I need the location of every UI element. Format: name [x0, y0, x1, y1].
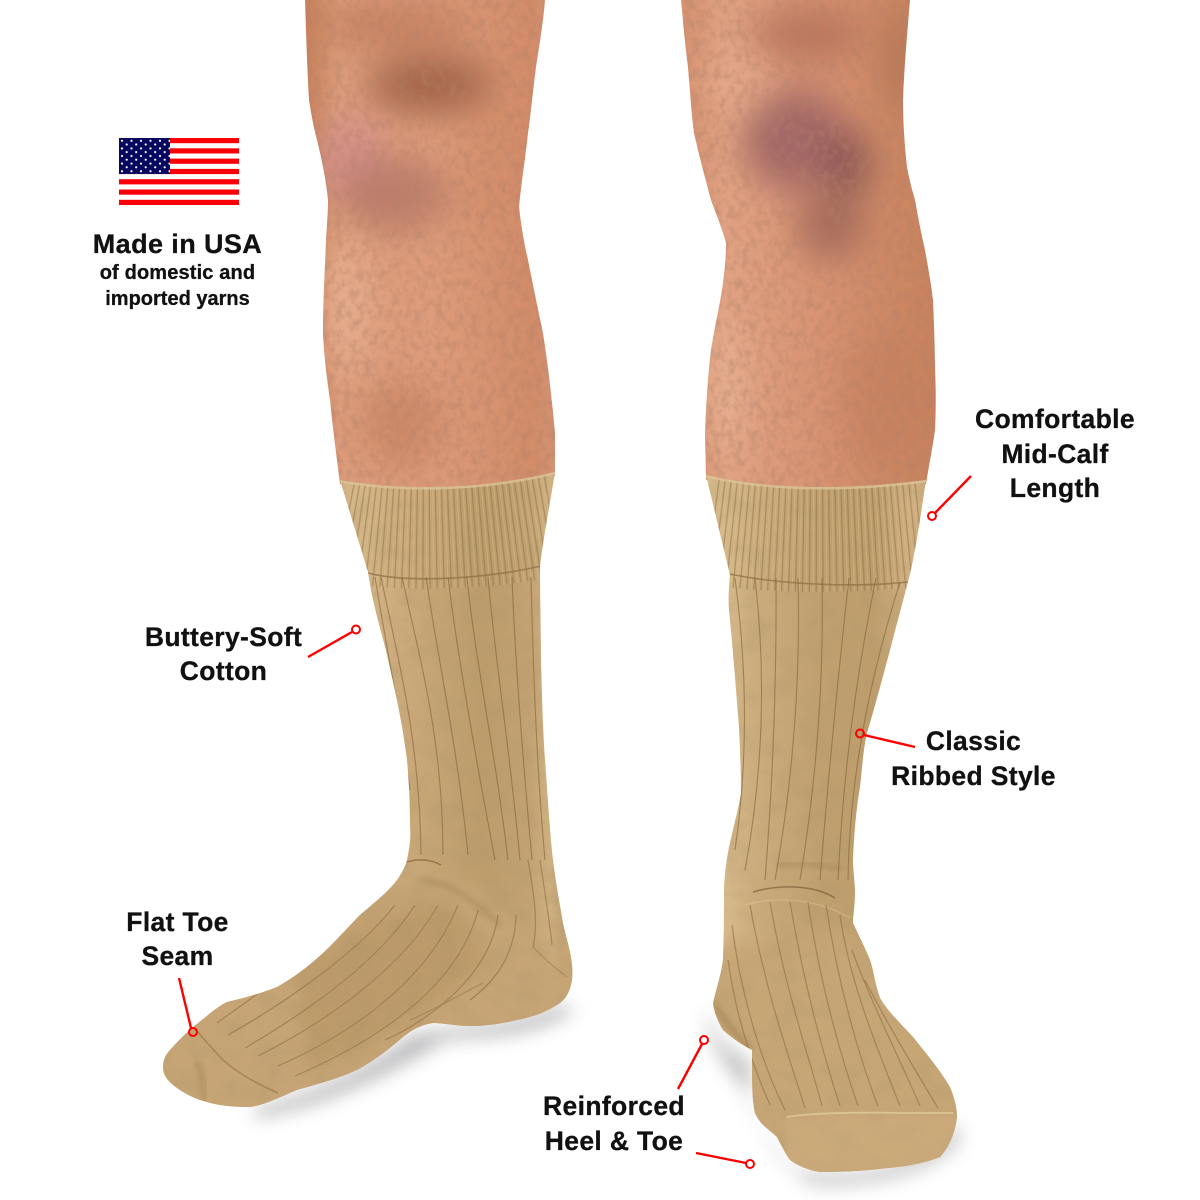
right sock cuff ribbing	[706, 476, 926, 585]
right leg	[680, 0, 940, 495]
text: Made in USA: of domestic and	[100, 262, 255, 284]
callout: Flat Toe Seam	[126, 907, 229, 1036]
callout: Flat Toe Seam: Flat Toe	[126, 907, 229, 937]
text: Made in USA	[93, 229, 262, 310]
callout: Reinforced Heel and Toe	[543, 1036, 754, 1168]
left sock leg ribs	[375, 577, 545, 860]
callout: Reinforced Heel and Toe: Heel & Toe	[545, 1126, 683, 1156]
callout: Comfortable Mid-Calf Length: Length	[1010, 473, 1100, 503]
skin hair texture right	[680, 0, 940, 495]
callout: Classic Ribbed Style: Ribbed Style	[891, 761, 1056, 791]
right ankle fold	[745, 864, 850, 918]
left foot ribs and shading	[217, 860, 552, 1076]
left heel and sole lines	[410, 947, 567, 1020]
knee shading left	[316, 3, 535, 470]
callout: Classic Ribbed Style	[856, 726, 1056, 791]
foot base tone right	[713, 928, 957, 1172]
left leg	[300, 0, 560, 495]
callout: Comfortable Mid-Calf Length: Mid-Calf	[1001, 439, 1109, 469]
callout: Buttery-Soft Cotton: Cotton	[180, 656, 267, 686]
sock texture left	[185, 487, 572, 1084]
sock texture right	[709, 486, 919, 862]
right toe seam	[787, 1113, 953, 1117]
text: Made in USA: Made in USA	[93, 229, 262, 259]
skin hair texture left	[300, 0, 560, 495]
callout: Buttery-Soft Cotton	[145, 622, 360, 686]
callout: Buttery-Soft Cotton: Buttery-Soft	[145, 622, 302, 652]
callout: Comfortable Mid-Calf Length: Comfortable	[975, 404, 1135, 434]
text: Made in USA: imported yarns	[105, 288, 250, 310]
callout: Reinforced Heel and Toe: Reinforced	[543, 1091, 685, 1121]
knee shading right	[706, 0, 909, 430]
right foot ribs	[728, 902, 938, 1110]
foot shadows	[255, 1005, 962, 1185]
right sock leg ribs	[735, 578, 900, 880]
foot base tone left	[163, 876, 572, 1107]
left toe seam	[193, 1027, 278, 1093]
icon: American flag	[119, 138, 239, 205]
callout: Flat Toe Seam: Seam	[141, 941, 214, 971]
left sock cuff ribbing	[340, 473, 555, 579]
callout: Comfortable Mid-Calf Length	[928, 404, 1135, 520]
left sock	[150, 470, 590, 1120]
callout: Classic Ribbed Style: Classic	[926, 726, 1021, 756]
right sock	[706, 475, 957, 1172]
